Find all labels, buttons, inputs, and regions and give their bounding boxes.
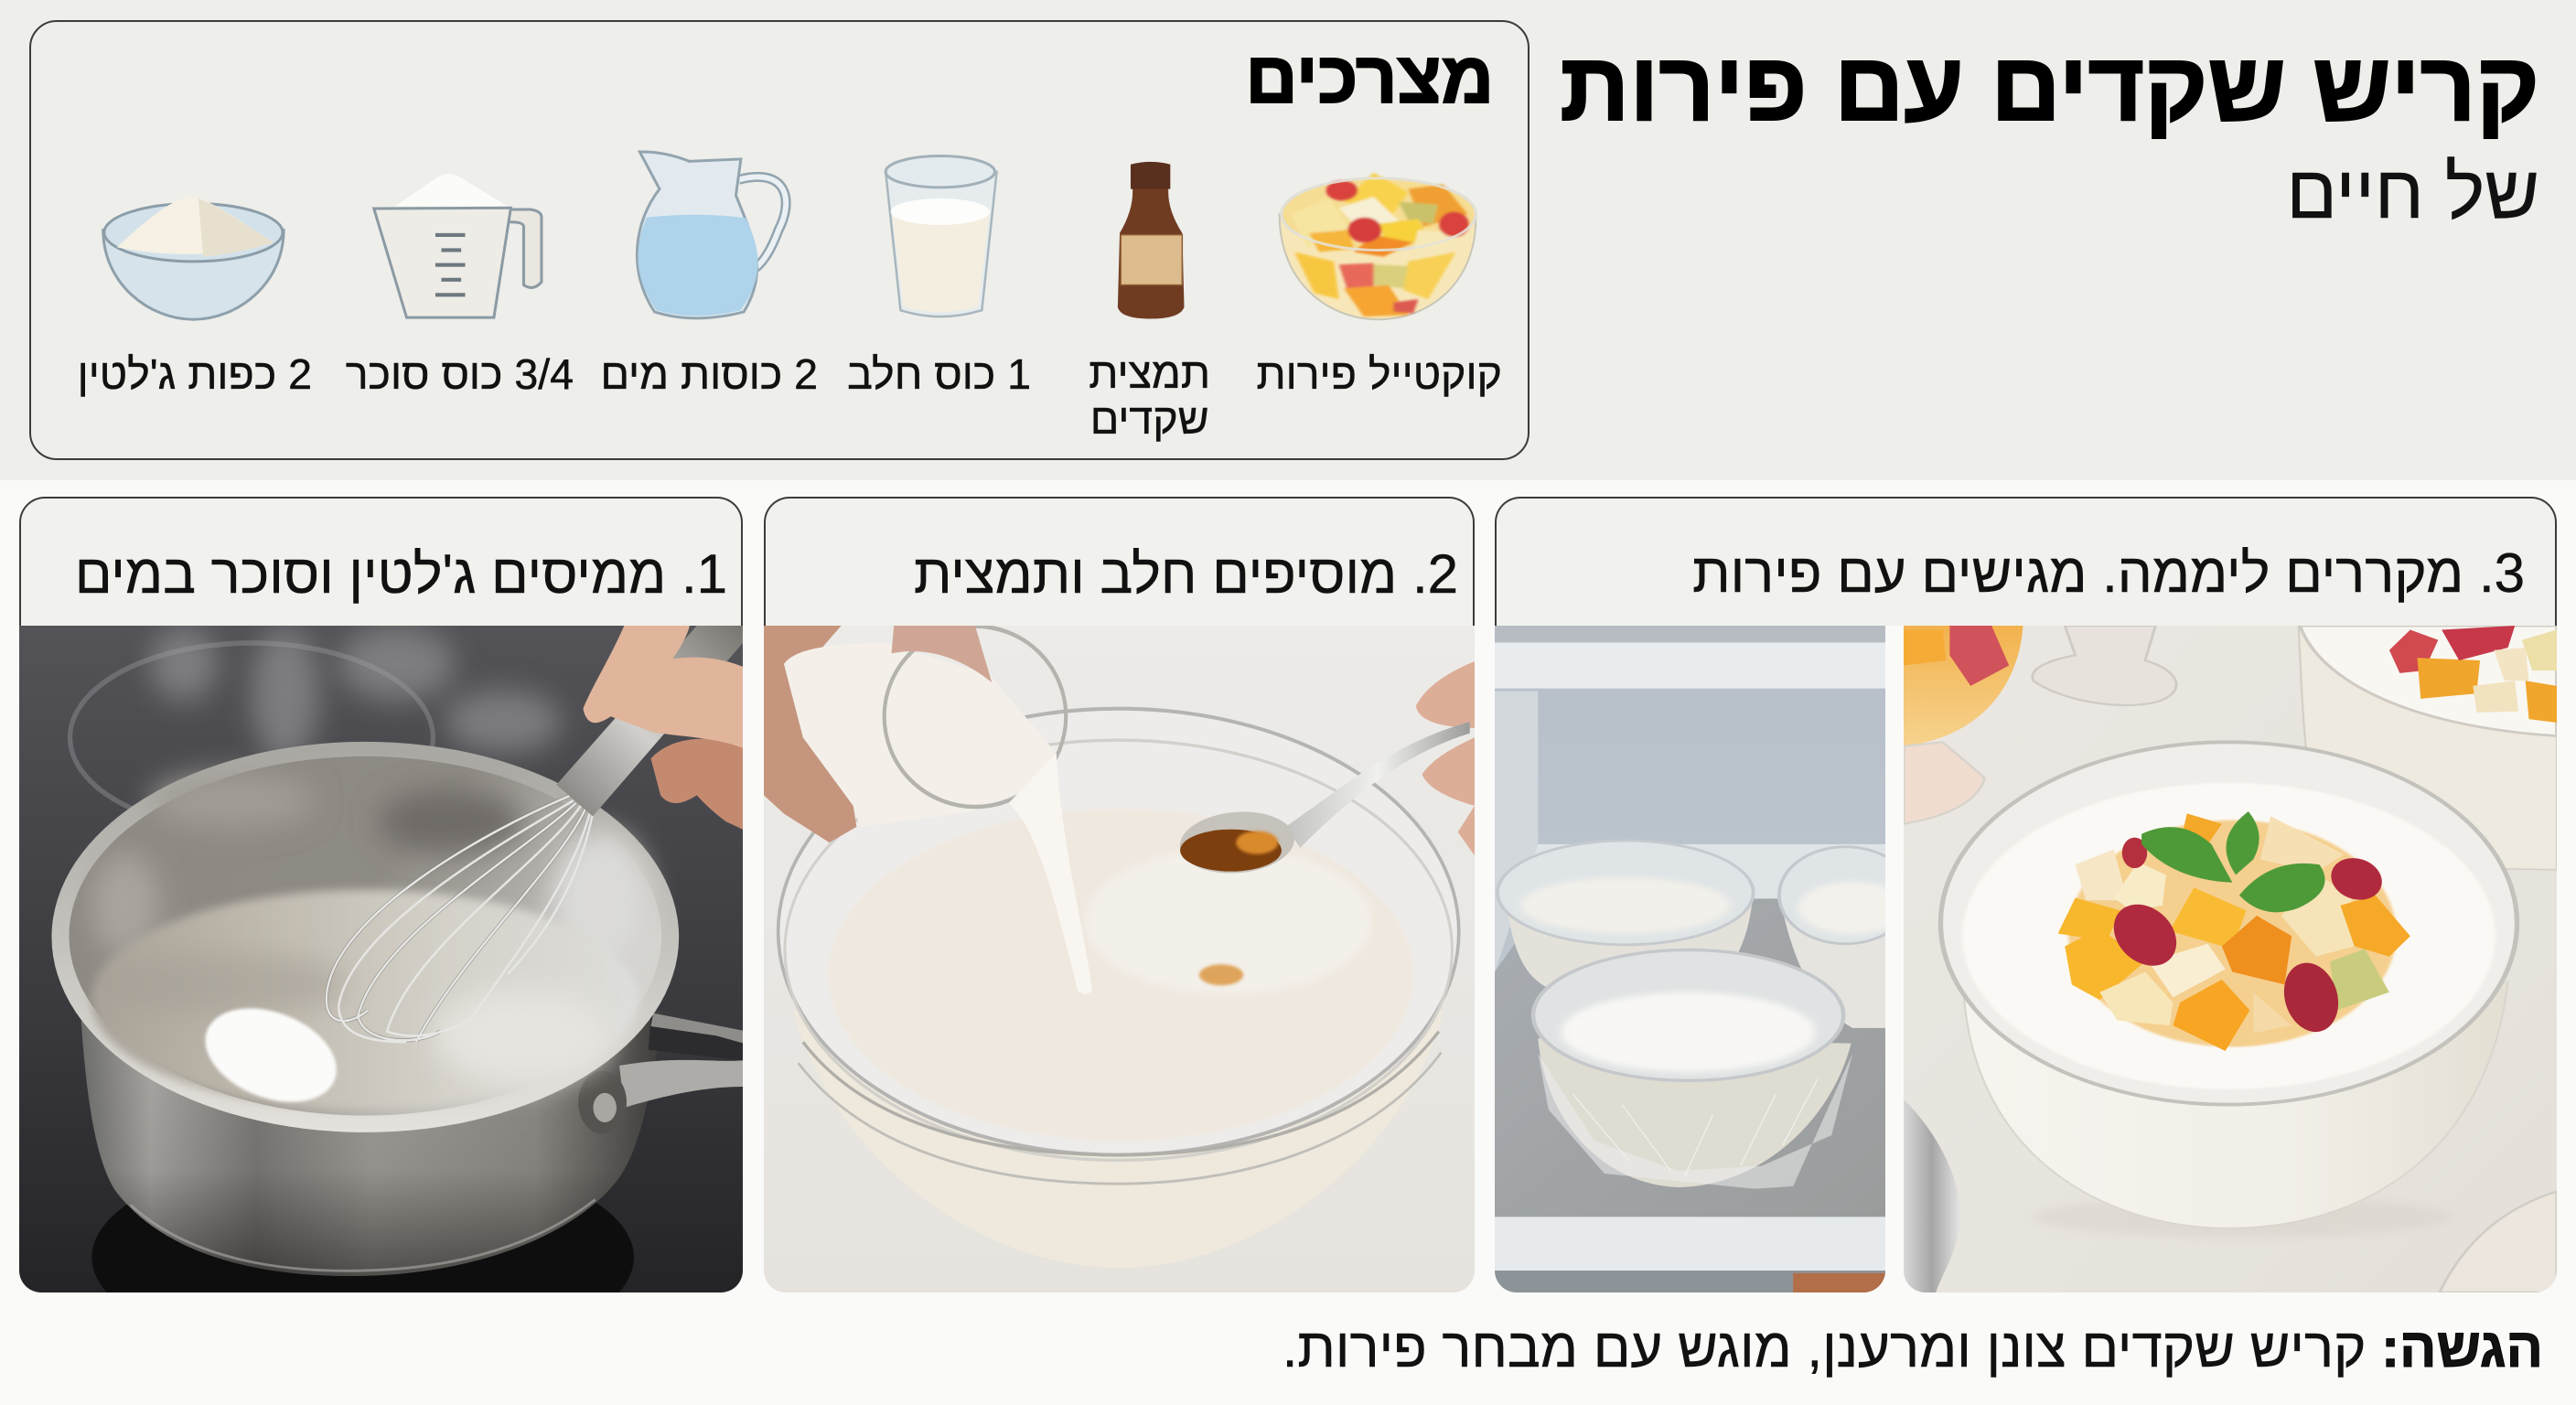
amber drops bbox=[1199, 964, 1243, 985]
step 2 header: 2. מוסיפים חלב ותמצית bbox=[914, 543, 1458, 605]
heading: ingredients: מצרכים bbox=[1246, 37, 1494, 118]
milk stream bbox=[1009, 753, 1092, 994]
icon: almond extract bottle bbox=[1118, 162, 1185, 319]
photo: pouring milk bbox=[764, 626, 1475, 1292]
bowl back left bbox=[1497, 841, 1754, 992]
step 1 header bbox=[19, 497, 743, 626]
sugar mound bbox=[194, 992, 348, 1119]
photo: chilling in fridge bbox=[1495, 626, 1885, 1292]
title: קריש שקדים עם פירות bbox=[1560, 33, 2539, 141]
icon: measuring cup with sugar bbox=[374, 174, 542, 317]
fruit topping bbox=[2058, 813, 2410, 1051]
bowl front bbox=[1533, 949, 1852, 1189]
label: almond extract: שקדים bbox=[1090, 395, 1209, 443]
label: gelatin: 2 כפות ג'לטין bbox=[78, 350, 312, 398]
shelf back bbox=[1495, 844, 1885, 900]
step 3 header: 3. מקררים ליממה. מגישים עם פירות bbox=[1692, 542, 2525, 604]
panel: ingredients bbox=[29, 20, 1530, 460]
burner ring bbox=[70, 643, 433, 832]
metal shelf bbox=[1495, 898, 1885, 1217]
bowl back right bbox=[1779, 847, 1912, 1028]
icon: water jug bbox=[637, 152, 786, 318]
hand bbox=[583, 626, 743, 748]
main bowl rim bbox=[1940, 742, 2517, 1105]
label: almond extract: תמצית bbox=[1089, 349, 1210, 397]
step 1 header: 1. ממיסים ג'לטין וסוכר במים bbox=[75, 543, 727, 605]
left hand bbox=[764, 626, 856, 842]
hob bbox=[91, 1150, 634, 1365]
mint leaves bbox=[2141, 811, 2325, 912]
label: fruit cocktail: קוקטייל פירות bbox=[1257, 350, 1502, 398]
photo: whisking in saucepan bbox=[19, 626, 743, 1292]
interior reflections bbox=[91, 774, 649, 969]
panel: step 3 bbox=[1495, 497, 2557, 1292]
bowl rim bbox=[778, 709, 1459, 1155]
label: sugar: 3/4 כוס סוכר bbox=[346, 350, 574, 398]
cream surface bbox=[1962, 783, 2496, 1089]
photo: served with fruit bbox=[1904, 626, 2557, 1292]
panel: step 1 bbox=[19, 497, 743, 1292]
main bowl shadow bbox=[2034, 1196, 2453, 1238]
bottom rail bbox=[1495, 1217, 1885, 1271]
glass of milk bbox=[784, 626, 1066, 827]
pan handle bbox=[578, 1014, 743, 1134]
glass dessert cup top left bbox=[1904, 626, 2023, 824]
saucepan body bbox=[81, 1011, 664, 1276]
top background band bbox=[0, 0, 2576, 480]
spoon bbox=[1904, 1099, 1960, 1292]
ingredient illustrations bbox=[102, 150, 1477, 321]
empty glass bbox=[2033, 626, 2176, 705]
subtitle: של חיים bbox=[2286, 151, 2539, 234]
bowl top right bbox=[2299, 626, 2557, 870]
whisk handle bbox=[556, 626, 743, 816]
main bowl body bbox=[1964, 982, 2508, 1228]
panel: step 2 bbox=[764, 497, 1475, 1292]
spoon bbox=[1178, 722, 1470, 877]
top rail bbox=[1495, 642, 1885, 689]
label: milk: 1 כוס חלב bbox=[847, 350, 1031, 398]
small glass bottom right bbox=[2440, 1191, 2557, 1292]
right hand bbox=[1416, 661, 1475, 855]
icon: fruit cocktail bowl bbox=[1280, 173, 1476, 319]
step 3 header bbox=[1495, 497, 2557, 626]
whisk bbox=[327, 795, 593, 1042]
water bbox=[91, 890, 639, 1110]
milk surface bbox=[829, 809, 1413, 1141]
hand back fingers bbox=[650, 739, 743, 830]
serving note: הגשה: קריש שקדים צונן ומרענן, מוגש עם מבחר פירות. bbox=[1283, 1317, 2543, 1378]
label: water: 2 כוסות מים bbox=[600, 350, 818, 398]
label: almond extract bbox=[1089, 349, 1210, 443]
icon: bowl of gelatin bbox=[103, 196, 284, 319]
bowl body bbox=[793, 1011, 1444, 1268]
pan rim and interior bbox=[51, 742, 679, 1132]
step 2 header bbox=[764, 497, 1475, 626]
steam bbox=[150, 627, 562, 764]
icon: glass of milk bbox=[886, 156, 997, 316]
